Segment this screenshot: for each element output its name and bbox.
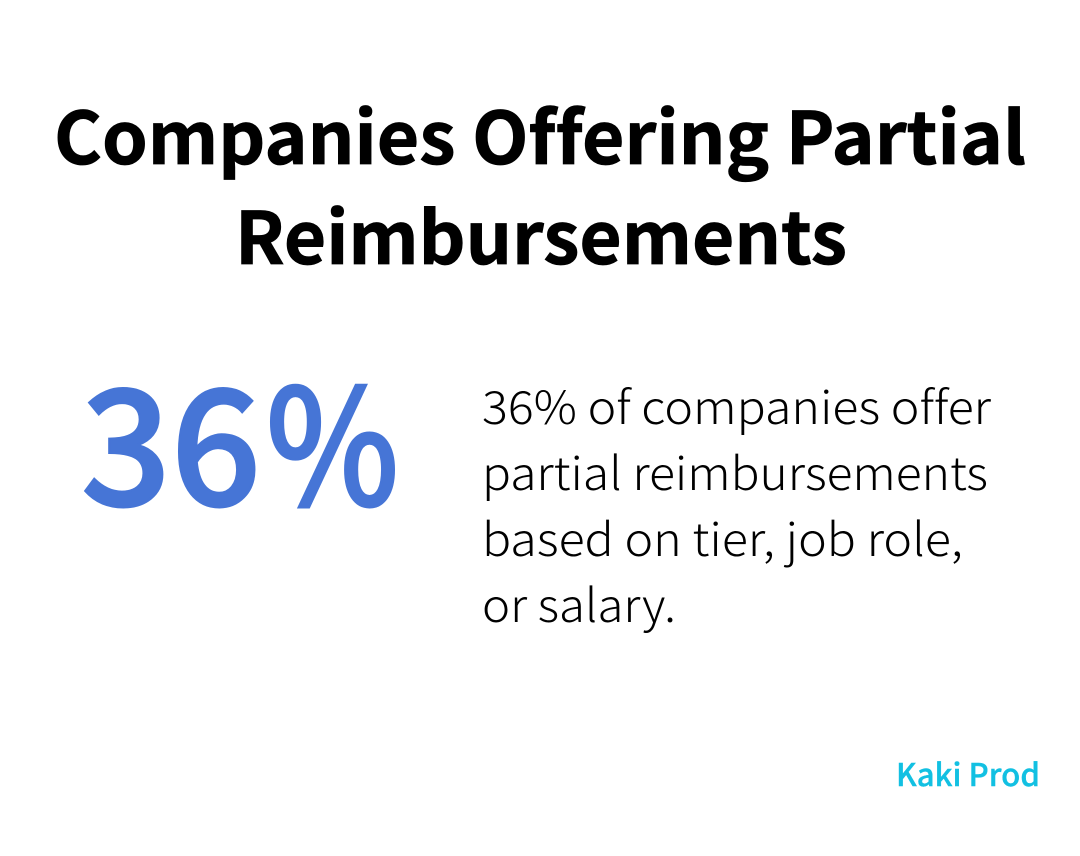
description text: or salary. [482, 570, 676, 636]
title [54, 80, 1026, 285]
description text: partial reimbursements [482, 438, 988, 504]
big statistic: 36%: % [266, 320, 399, 552]
description text: 36% of companies offer [482, 372, 991, 438]
title: Reimbursements [235, 180, 847, 285]
big statistic: 36%: 36 [81, 320, 261, 552]
big statistic: 36% [81, 320, 399, 552]
description text [482, 372, 991, 636]
title: Companies Offering Partial [54, 80, 1026, 185]
logo: Kaki Prod: Kaki Prod [896, 750, 1040, 795]
description text: based on tier, job role, [482, 504, 963, 570]
